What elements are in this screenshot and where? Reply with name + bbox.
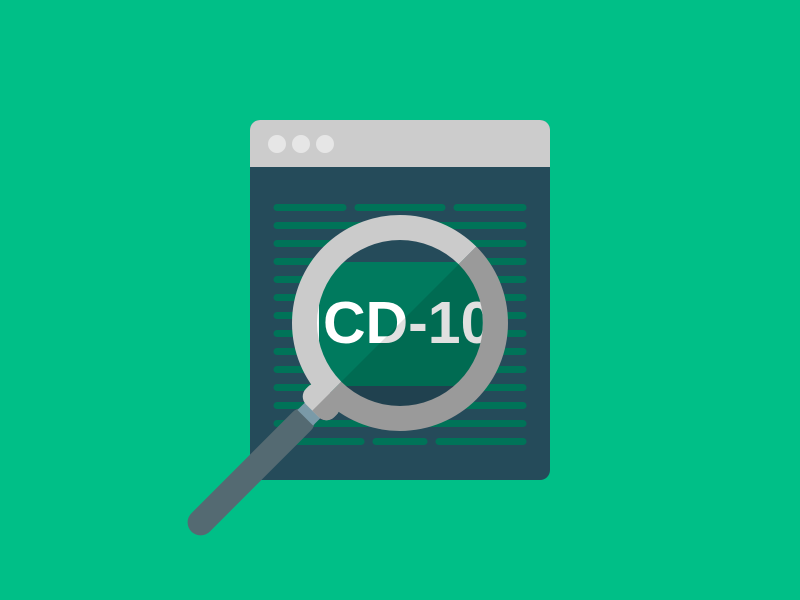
handle — [182, 403, 320, 541]
window header bar — [250, 120, 550, 167]
browser window — [250, 120, 550, 480]
magnifying glass — [115, 170, 553, 600]
ring — [247, 170, 476, 399]
ICD-10 label: ICD-10 — [307, 290, 493, 356]
text lines — [277, 208, 523, 442]
window dots — [268, 135, 334, 153]
magnifier lens content — [317, 240, 483, 406]
connector — [298, 379, 344, 425]
